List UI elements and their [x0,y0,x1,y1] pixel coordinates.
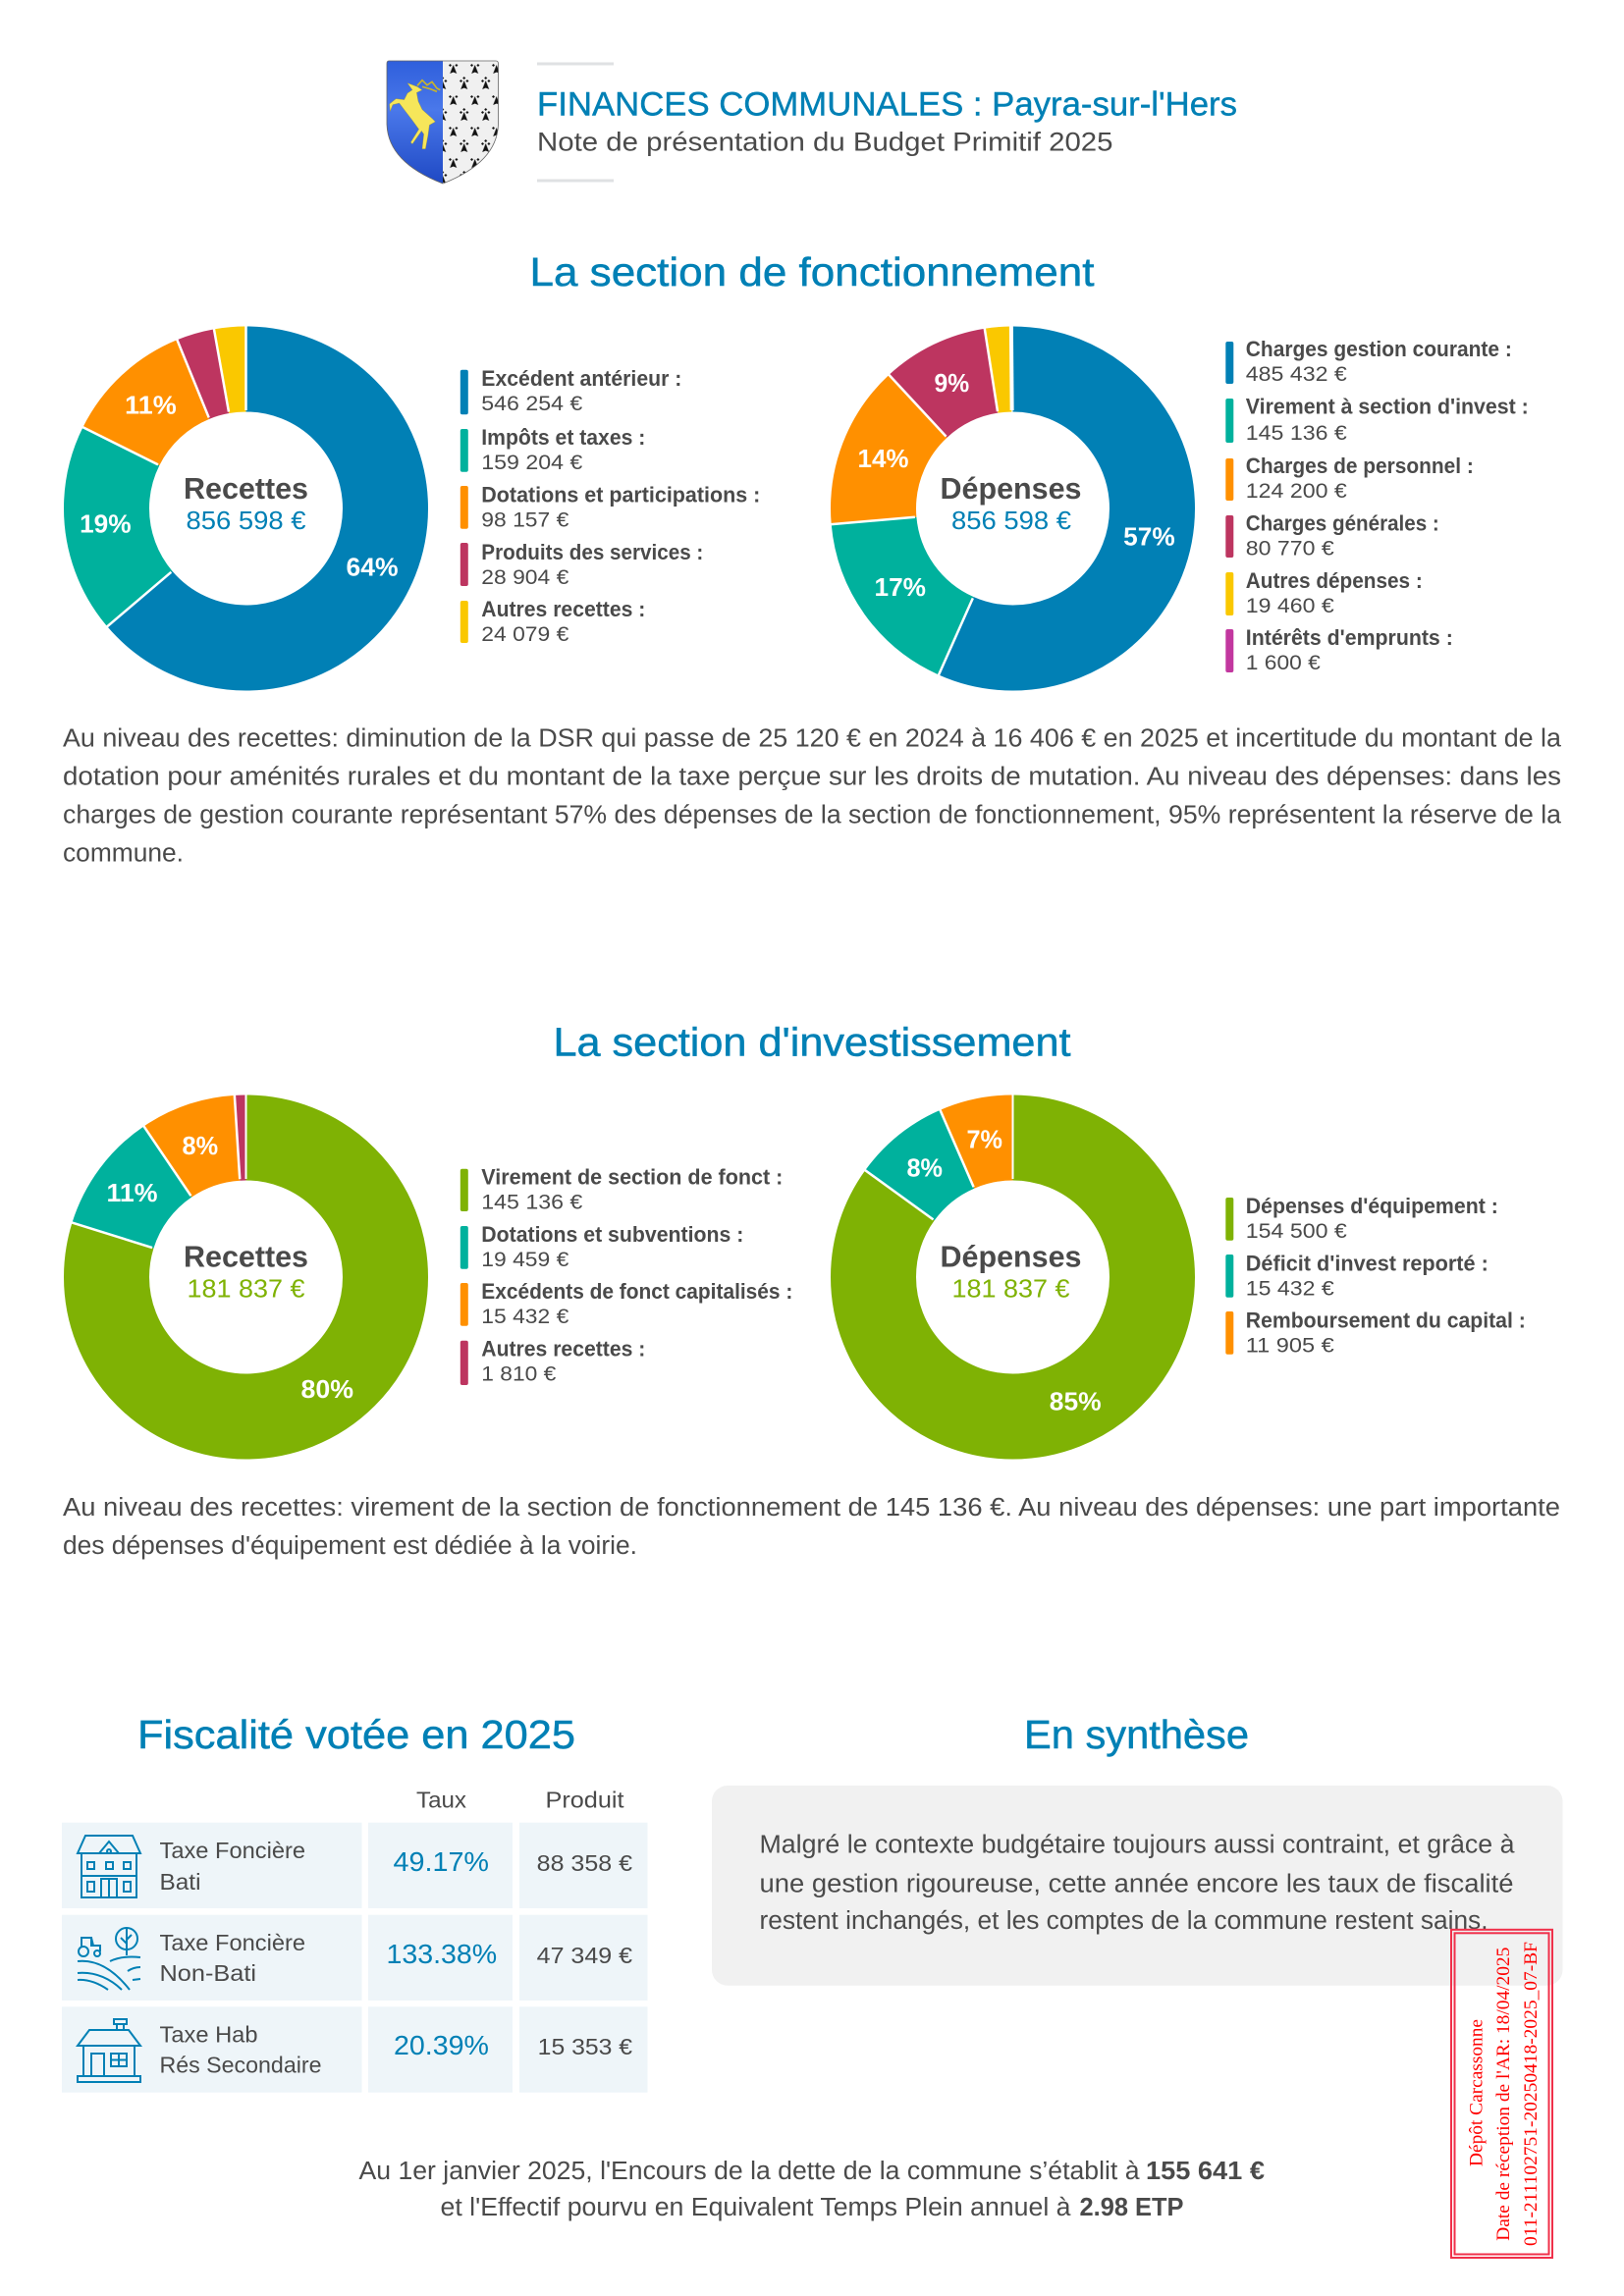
donut chart: dépenses d'investissement: 181 837 € [952,1276,1070,1304]
legend: dépenses d'investissement: 11 905 € [1246,1334,1334,1357]
text block: dette et effectif: 155 641 € [1146,2158,1265,2185]
legend: recettes d'investissement: Autres recettes : [481,1337,645,1362]
table row: taxe foncière non-bâti: 133.38% [387,1939,497,1969]
legend: recettes de fonctionnement: Autres recettes : [481,597,645,621]
table row: taxe foncière non-bâti [62,1915,648,2001]
donut chart: recettes de fonctionnement [80,324,398,648]
legend: recettes de fonctionnement: Produits des services : [481,540,703,564]
legend: dépenses d'investissement [1225,1194,1526,1357]
donut chart: recettes d'investissement: Recettes [184,1241,308,1274]
panel: en synthèse: une gestion rigoureuse, cette année encore les taux de fiscalité [760,1870,1514,1897]
legend: dépenses de fonctionnement [1225,337,1529,674]
legend: recettes de fonctionnement: 98 157 € [481,509,569,532]
donut chart: recettes de fonctionnement: 11% [125,393,177,420]
donut chart: dépenses d'investissement: 8% [907,1155,943,1183]
subtitle: Note de présentation du Budget Primitif 2025 [537,127,1113,156]
donut chart: recettes de fonctionnement: 64% [346,555,399,582]
donut chart: dépenses de fonctionnement [829,324,1175,677]
legend: dépenses de fonctionnement: Charges gestion courante : [1246,337,1512,361]
panel: tableau de fiscalité [62,1788,648,2093]
text block: commentaire fonctionnement: Au niveau des recettes: diminution de la DSR qui passe de 25 120 € en 2024 à 16 406 € en 2025 et incertitude du montant de la [63,725,1562,753]
stamp: dépôt préfecture [1451,1930,1552,2258]
donut chart: recettes d'investissement: 8% [183,1133,218,1160]
legend: dépenses de fonctionnement: Charges générales : [1246,511,1439,536]
icon: coat of arms [387,61,500,184]
text block: commentaire fonctionnement: commune. [63,840,184,868]
donut chart: dépenses de fonctionnement: 856 598 € [951,507,1071,535]
table row: taxe habitation résidence secondaire: 15 353 € [538,2034,632,2059]
header [387,61,1237,184]
donut chart: dépenses d'investissement: 85% [1050,1389,1102,1416]
table row: taxe foncière bâti: Bati [159,1869,200,1895]
panel: en synthèse: Malgré le contexte budgétaire toujours aussi contraint, et grâce à [760,1832,1515,1859]
legend: dépenses de fonctionnement: 124 200 € [1246,480,1347,503]
legend: recettes d'investissement: 1 810 € [481,1363,557,1386]
table row: taxe foncière bâti [62,1823,648,1908]
donut chart: dépenses de fonctionnement: 57% [1123,524,1175,552]
title: FINANCES COMMUNALES : Payra-sur-l'Hers [537,86,1237,124]
text block: commentaire fonctionnement: charges de gestion courante représentant 57% des dépenses de la section de fonctionnement, 95% représentent la réserve de la [63,802,1562,829]
donut chart: recettes de fonctionnement: 856 598 € [187,507,306,535]
donut chart: recettes de fonctionnement: Recettes [184,472,308,506]
table row: taxe foncière bâti: 49.17% [393,1846,489,1877]
legend: dépenses de fonctionnement: 1 600 € [1246,652,1321,674]
legend: dépenses de fonctionnement: Autres dépenses : [1246,568,1423,593]
legend: recettes de fonctionnement: Impôts et taxes : [481,425,645,450]
legend: recettes d'investissement: Excédents de fonct capitalisés : [481,1279,792,1304]
legend: recettes d'investissement: Dotations et subventions : [481,1222,743,1247]
panel: tableau de fiscalité: Produit [546,1788,624,1813]
donut chart: recettes d'investissement: 181 837 € [187,1276,304,1304]
table row: taxe foncière non-bâti: Taxe Foncière [159,1930,305,1955]
text block: dette et effectif: Au 1er janvier 2025, l'Encours de la dette de la commune s’établit à [359,2158,1140,2185]
legend: recettes de fonctionnement: 24 079 € [481,623,569,646]
table row: taxe foncière bâti: 88 358 € [537,1850,632,1876]
table row: taxe habitation résidence secondaire: 20.39% [394,2030,489,2060]
legend: recettes de fonctionnement: Excédent antérieur : [481,366,681,391]
donut chart: dépenses de fonctionnement: Dépenses [941,472,1082,506]
legend: dépenses de fonctionnement: 80 770 € [1246,538,1334,561]
table row: taxe habitation résidence secondaire [62,2006,648,2093]
donut chart: recettes d'investissement: 80% [300,1376,353,1404]
legend: recettes d'investissement: 19 459 € [481,1249,569,1271]
table row: taxe foncière non-bâti: 47 349 € [537,1943,632,1968]
donut chart: dépenses de fonctionnement: 9% [935,370,969,398]
panel: en synthèse: restent inchangés, et les comptes de la commune restent sains. [760,1907,1489,1935]
icon: maison [78,1836,140,1897]
text block: commentaire investissement [63,1494,1560,1560]
text block: commentaire fonctionnement: dotation pour aménités rurales et du montant de la taxe perçue sur les droits de mutation. Au niveau des dépenses: dans les [63,764,1561,791]
text block: dette et effectif: et l'Effectif pourvu en Equivalent Temps Plein annuel à [440,2194,1071,2221]
heading: en synthèse: En synthèse [1024,1712,1249,1757]
legend: dépenses d'investissement: 154 500 € [1246,1220,1347,1243]
stamp: dépôt préfecture: Date de réception de l'AR: 18/04/2025 [1494,1948,1514,2241]
donut chart: recettes de fonctionnement: 19% [80,511,132,539]
legend: recettes de fonctionnement: 546 254 € [481,393,583,415]
legend: dépenses de fonctionnement: Intérêts d'emprunts : [1246,625,1453,650]
table row: taxe habitation résidence secondaire: Rés Secondaire [159,2053,322,2078]
legend: recettes d'investissement: 145 136 € [481,1192,583,1214]
heading: section d'investissement: La section d'investissement [554,1019,1071,1064]
icon: maison secondaire [78,2019,140,2082]
legend: dépenses de fonctionnement: 485 432 € [1246,363,1347,386]
heading: fiscalité: Fiscalité votée en 2025 [137,1712,575,1757]
legend: recettes de fonctionnement: 28 904 € [481,566,569,589]
donut chart: dépenses d'investissement [863,1093,1153,1416]
legend: recettes d'investissement: 15 432 € [481,1306,569,1328]
legend: recettes de fonctionnement: Dotations et participations : [481,483,760,507]
legend: dépenses de fonctionnement: 145 136 € [1246,422,1347,445]
table row: taxe foncière non-bâti: Non-Bati [159,1960,256,1986]
legend: dépenses d'investissement: 15 432 € [1246,1277,1334,1300]
legend: dépenses de fonctionnement: 19 460 € [1246,595,1334,617]
legend: recettes de fonctionnement [460,366,760,646]
legend: recettes de fonctionnement: 159 204 € [481,452,583,474]
legend: dépenses de fonctionnement: Virement à section d'invest : [1246,395,1529,419]
panel: en synthèse [712,1786,1563,1986]
text block: commentaire investissement: Au niveau des recettes: virement de la section de fonctionnement de 145 136 €. Au niveau des dépenses: une part importante [63,1494,1560,1522]
table row: taxe habitation résidence secondaire: Taxe Hab [159,2022,257,2048]
text block: commentaire fonctionnement [63,725,1562,868]
text block: dette et effectif: 2.98 ETP [1080,2194,1184,2221]
legend: recettes d'investissement [460,1165,792,1386]
donut chart: dépenses de fonctionnement: 14% [858,446,909,473]
stamp: dépôt préfecture: 011-211102751-20250418-2025_07-BF [1522,1942,1542,2246]
icon: champ et tracteur [78,1928,140,1990]
legend: dépenses d'investissement: Déficit d'invest reporté : [1246,1251,1489,1275]
text block: dette et effectif [359,2158,1265,2221]
legend: dépenses d'investissement: Dépenses d'équipement : [1246,1194,1498,1218]
heading: section de fonctionnement: La section de fonctionnement [530,249,1095,294]
donut chart: recettes d'investissement [70,1093,385,1416]
legend: dépenses de fonctionnement: Charges de personnel : [1246,454,1474,478]
text block: commentaire investissement: des dépenses d'équipement est dédiée à la voirie. [63,1532,637,1560]
donut chart: recettes d'investissement: 11% [106,1180,157,1207]
donut chart: dépenses d'investissement: 7% [966,1126,1002,1153]
table row: taxe foncière bâti: Taxe Foncière [159,1838,305,1863]
panel: tableau de fiscalité: Taux [416,1788,467,1813]
donut chart: dépenses de fonctionnement: 17% [874,574,926,602]
donut chart: dépenses d'investissement: Dépenses [941,1241,1082,1274]
legend: recettes d'investissement: Virement de section de fonct : [481,1165,783,1190]
legend: dépenses d'investissement: Remboursement du capital : [1246,1308,1526,1332]
stamp: dépôt préfecture: Dépôt Carcassonne [1467,2019,1487,2166]
